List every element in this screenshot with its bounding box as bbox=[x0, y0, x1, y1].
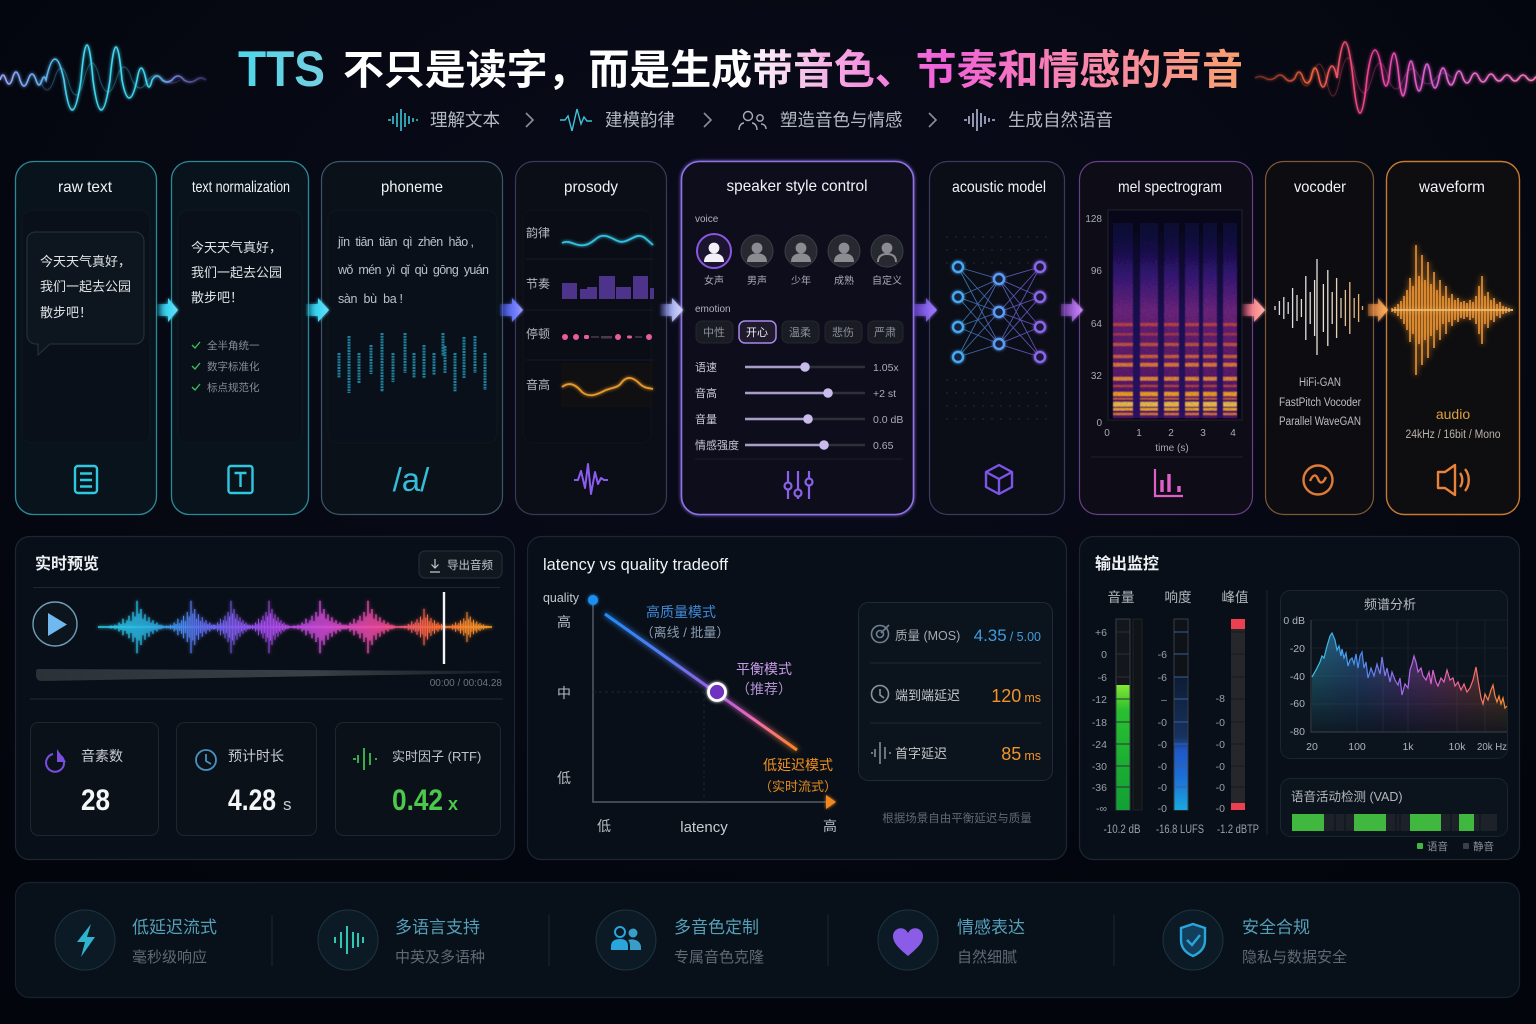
icon: wave 1 bbox=[388, 109, 418, 131]
panel: live preview bbox=[16, 536, 514, 860]
panel: text normalization: text normalization bbox=[192, 179, 290, 196]
title: TTS bbox=[238, 41, 325, 97]
stat: duration: 4.28 bbox=[228, 784, 276, 817]
tradeoff chart: 低 bbox=[557, 770, 571, 786]
emotion chips: 中性 bbox=[703, 325, 725, 339]
spectrum analyser: 1k bbox=[1402, 741, 1414, 753]
voice selector: 成熟 bbox=[834, 274, 854, 287]
loudness meter: – bbox=[1161, 694, 1167, 706]
sliders: 0.0 dB bbox=[873, 414, 903, 426]
voice selector: 少年 bbox=[791, 274, 811, 287]
export button: 导出音频 bbox=[447, 558, 493, 572]
metrics box bbox=[858, 602, 1052, 780]
VAD panel: 语音活动检测 (VAD) bbox=[1291, 789, 1403, 804]
feature: safety bbox=[1163, 910, 1347, 970]
spectrogram chart: time (s) bbox=[1155, 443, 1189, 454]
prosody labels: 停顿 bbox=[526, 326, 550, 341]
VAD legend: 静音 bbox=[1473, 840, 1494, 853]
feature: low latency: 低延迟流式 bbox=[132, 918, 217, 937]
step: understand text: 理解文本 bbox=[430, 110, 500, 130]
caption: 根据场景自由平衡延迟与质量 bbox=[882, 811, 1032, 825]
sliders bbox=[695, 361, 903, 452]
volume meter: -36 bbox=[1092, 782, 1107, 794]
volume meter: -12 bbox=[1092, 694, 1107, 706]
stat: duration: 预计时长 bbox=[228, 748, 284, 764]
feature: multi language: 多语言支持 bbox=[395, 918, 480, 937]
panel: feature strip bbox=[16, 882, 1520, 998]
tradeoff chart: 低 bbox=[597, 818, 611, 834]
volume meter: -6 bbox=[1098, 672, 1107, 684]
audio info: audio bbox=[1436, 406, 1470, 422]
metric: MOS: 质量 (MOS) bbox=[895, 629, 960, 643]
spectrogram chart bbox=[1085, 210, 1242, 454]
volume meter bbox=[1092, 619, 1142, 836]
loudness meter: -16.8 LUFS bbox=[1156, 824, 1204, 836]
feature: low latency: 毫秒级响应 bbox=[132, 948, 207, 966]
feature: safety: 安全合规 bbox=[1242, 918, 1310, 937]
icon: wave 3 bbox=[964, 109, 995, 131]
feature: voice customization: 多音色定制 bbox=[674, 918, 759, 937]
voice selector: 女声 bbox=[704, 274, 724, 287]
spectrum analyser: 0 dB bbox=[1283, 615, 1305, 627]
pinyin bbox=[337, 235, 489, 306]
volume meter: -30 bbox=[1092, 761, 1107, 773]
sliders: 语速 bbox=[695, 361, 717, 374]
stat: duration: s bbox=[283, 795, 292, 814]
emotion chips: 温柔 bbox=[789, 326, 811, 339]
tradeoff chart: （推荐） bbox=[736, 681, 792, 697]
volume meter: -10.2 dB bbox=[1104, 824, 1141, 836]
VAD legend: 语音 bbox=[1427, 840, 1448, 853]
spectrogram chart: 3 bbox=[1200, 428, 1206, 439]
normalized text: 散步吧！ bbox=[191, 290, 243, 305]
volume meter: -∞ bbox=[1096, 803, 1107, 815]
panel: waveform: waveform bbox=[1418, 179, 1485, 196]
stat: phoneme count: 28 bbox=[81, 784, 110, 817]
voice selector: voice bbox=[695, 214, 719, 225]
panel: phoneme: phoneme bbox=[381, 179, 443, 196]
panel: mel spectrogram: mel spectrogram bbox=[1118, 179, 1222, 196]
icon: speaker bbox=[1438, 465, 1469, 495]
normalized text bbox=[191, 240, 282, 305]
voice selector: 自定义 bbox=[872, 274, 902, 287]
playhead bbox=[443, 592, 445, 664]
metric: first token: 首字延迟 bbox=[895, 746, 947, 761]
panel: speaker style control bbox=[682, 162, 914, 514]
checklist bbox=[192, 339, 260, 394]
panel: vocoder bbox=[1266, 162, 1374, 514]
panel: prosody: prosody bbox=[564, 179, 618, 196]
peak meter bbox=[1216, 619, 1259, 836]
metric: MOS: 4.35/ 5.00 bbox=[974, 626, 1041, 645]
emotion chips: 严肃 bbox=[874, 326, 896, 339]
loudness meter: -0 bbox=[1158, 739, 1167, 751]
neural network bbox=[953, 262, 1045, 362]
stat: duration bbox=[176, 722, 316, 836]
stat: real-time factor: 实时因子 (RTF) bbox=[392, 749, 481, 764]
icon: /a/: /a/ bbox=[393, 461, 430, 498]
step: timbre and emotion: 塑造音色与情感 bbox=[780, 110, 902, 130]
stat: phoneme count bbox=[30, 722, 158, 836]
pinyin: jīn tiān tiān qì zhēn hǎo , bbox=[337, 235, 474, 249]
tempo bars bbox=[562, 276, 654, 299]
feature: voice customization: 专属音色克隆 bbox=[674, 949, 764, 966]
panel: latency vs quality bbox=[528, 536, 1066, 860]
spectrogram chart: 4 bbox=[1230, 428, 1236, 439]
peak meter: -0 bbox=[1216, 717, 1225, 729]
arrow 3 bbox=[500, 298, 523, 322]
pipeline steps subtitle bbox=[388, 109, 1113, 131]
metric: latency: 120ms bbox=[991, 686, 1041, 706]
tradeoff chart: 中 bbox=[557, 685, 571, 701]
spectrogram chart: 32 bbox=[1091, 371, 1102, 382]
panel: latency vs quality: latency vs quality tradeoff bbox=[543, 555, 728, 574]
emotion chips: emotion bbox=[695, 304, 731, 315]
feature: multi language: 中英及多语种 bbox=[395, 948, 485, 966]
panel: prosody bbox=[516, 162, 666, 514]
loudness meter: -0 bbox=[1158, 782, 1167, 794]
peak meter: -1.2 dBTP bbox=[1217, 824, 1259, 836]
sliders: 情感强度 bbox=[695, 438, 739, 452]
left header waveform bbox=[0, 45, 206, 110]
voice selector bbox=[695, 214, 903, 287]
tradeoff chart: 高 bbox=[557, 614, 571, 630]
panel: live preview: 实时预览 bbox=[35, 554, 99, 573]
panel: phoneme bbox=[322, 162, 502, 514]
meter headers: 音量 bbox=[1108, 589, 1134, 605]
prosody labels: 音高 bbox=[526, 377, 550, 392]
meter headers: 峰值 bbox=[1222, 590, 1248, 605]
feature: emotion bbox=[878, 910, 1025, 970]
spectrum analyser: -80 bbox=[1290, 726, 1305, 738]
spectrum analyser bbox=[1280, 590, 1508, 758]
chevron bbox=[704, 113, 711, 127]
stat: real-time factor: x bbox=[448, 794, 458, 814]
metric: latency: 端到端延迟 bbox=[895, 688, 960, 703]
meter headers bbox=[1108, 589, 1248, 605]
panel: text normalization bbox=[172, 162, 308, 514]
pinyin: sàn bù ba ! bbox=[338, 292, 403, 306]
vocoder models: Parallel WaveGAN bbox=[1279, 416, 1361, 428]
speech bubble: 我们一起去公园 bbox=[40, 279, 131, 294]
spectrogram chart: 0 bbox=[1104, 428, 1110, 439]
panel: output monitor: 输出监控 bbox=[1095, 554, 1159, 573]
spectrogram chart: 64 bbox=[1091, 319, 1102, 330]
spectrum analyser: -40 bbox=[1290, 671, 1305, 683]
spectrogram chart: 96 bbox=[1091, 266, 1102, 277]
loudness meter bbox=[1156, 619, 1204, 836]
spectrogram chart: 2 bbox=[1168, 428, 1174, 439]
volume meter: +6 bbox=[1095, 627, 1107, 639]
emotion chips: 开心 bbox=[746, 326, 768, 339]
arrow 1 bbox=[157, 298, 178, 322]
volume meter: -24 bbox=[1092, 739, 1107, 751]
loudness meter: -6 bbox=[1158, 672, 1167, 684]
step: generate speech: 生成自然语音 bbox=[1008, 110, 1113, 130]
arrow 6 bbox=[1061, 298, 1083, 322]
normalized text: 今天天气真好， bbox=[191, 240, 282, 255]
spectrum analyser: 10k bbox=[1449, 741, 1466, 753]
arrow 8 bbox=[1368, 298, 1388, 322]
phoneme bars bbox=[339, 333, 485, 393]
chevron bbox=[929, 113, 936, 127]
sliders: 1.05x bbox=[873, 362, 899, 374]
prosody labels bbox=[526, 225, 550, 392]
voice selector: 男声 bbox=[747, 274, 767, 287]
panel: mel spectrogram bbox=[1080, 162, 1252, 514]
tradeoff chart: （离线 / 批量） bbox=[641, 625, 729, 640]
tradeoff chart: 平衡模式 bbox=[736, 661, 792, 677]
VAD legend bbox=[1417, 840, 1494, 853]
play button bbox=[33, 602, 77, 646]
pitch curve bbox=[561, 363, 653, 407]
orange wave bbox=[1392, 245, 1513, 375]
spectrum analyser: -60 bbox=[1290, 698, 1305, 710]
peak meter: -8 bbox=[1216, 693, 1225, 705]
icon: cube bbox=[986, 465, 1012, 494]
loudness meter: -6 bbox=[1158, 649, 1167, 661]
checklist: 标点规范化 bbox=[207, 381, 260, 394]
spectrogram chart: 0 bbox=[1096, 418, 1102, 429]
stat: phoneme count: 音素数 bbox=[81, 748, 123, 764]
peak meter: -0 bbox=[1216, 739, 1225, 751]
stat: real-time factor: 0.42 bbox=[392, 784, 443, 817]
spectrum analyser: -20 bbox=[1290, 643, 1305, 655]
icon: bar chart bbox=[1155, 469, 1183, 496]
prosody labels: 节奏 bbox=[526, 277, 550, 291]
metric: first token: 85ms bbox=[1001, 744, 1041, 764]
panel: speaker style control: speaker style control bbox=[726, 178, 868, 195]
vocoder wave bbox=[1275, 259, 1362, 355]
sliders: 0.65 bbox=[873, 440, 894, 452]
metric: first token bbox=[871, 742, 1041, 764]
speech bubble: 今天天气真好， bbox=[40, 254, 131, 269]
feature: low latency bbox=[55, 910, 217, 970]
panel: raw text bbox=[16, 162, 156, 514]
title: 不只是读字，而是生成带音色、节奏和情感的声音 bbox=[343, 47, 1243, 93]
panel: vocoder: vocoder bbox=[1294, 179, 1347, 196]
peak meter: -0 bbox=[1216, 761, 1225, 773]
checklist: 数字标准化 bbox=[207, 360, 260, 373]
timeline bbox=[36, 669, 502, 689]
chevron bbox=[526, 113, 533, 127]
icon: document bbox=[75, 466, 97, 493]
rhythm curve bbox=[562, 236, 653, 245]
panel: output monitor bbox=[1080, 536, 1520, 860]
loudness meter: -0 bbox=[1158, 717, 1167, 729]
loudness meter: -0 bbox=[1158, 761, 1167, 773]
prosody labels: 韵律 bbox=[526, 225, 550, 240]
spectrum analyser: 频谱分析 bbox=[1364, 597, 1416, 612]
spectrum analyser: 20 bbox=[1306, 741, 1318, 753]
icon: wave 2 bbox=[560, 109, 592, 131]
volume meter: -18 bbox=[1092, 717, 1107, 729]
normalized text: 我们一起去公园 bbox=[191, 265, 282, 280]
sliders: +2 st bbox=[873, 388, 896, 400]
tradeoff chart: latency bbox=[680, 819, 728, 836]
speech bubble bbox=[27, 232, 144, 355]
feature: emotion: 自然细腻 bbox=[957, 949, 1017, 966]
panel: waveform bbox=[1386, 162, 1520, 514]
icon: oscillator bbox=[1304, 466, 1332, 494]
sliders: 音量 bbox=[695, 412, 717, 426]
panel: acoustic model bbox=[930, 162, 1064, 514]
panel: waveform: 24kHz / 16bit / Mono bbox=[1406, 429, 1500, 441]
speech bubble: 散步吧！ bbox=[40, 305, 92, 320]
vocoder models bbox=[1279, 377, 1361, 428]
emotion chips bbox=[695, 304, 903, 343]
meter headers: 响度 bbox=[1164, 590, 1192, 605]
tradeoff chart: （实时流式） bbox=[759, 779, 837, 794]
volume meter: 0 bbox=[1101, 649, 1107, 661]
vocoder models: HiFi-GAN bbox=[1299, 377, 1341, 389]
feature: multi language bbox=[318, 910, 485, 970]
pause dots bbox=[562, 334, 652, 340]
spectrogram chart: 1 bbox=[1136, 428, 1142, 439]
arrow 5 bbox=[914, 298, 937, 322]
step: prosody modeling: 建模韵律 bbox=[605, 110, 675, 130]
icon: sliders bbox=[784, 471, 812, 499]
peak meter: -0 bbox=[1216, 782, 1225, 794]
tradeoff chart: 高 bbox=[823, 818, 837, 834]
arrow 2 bbox=[306, 298, 329, 322]
metric: latency bbox=[872, 686, 1041, 706]
tradeoff chart: 高质量模式 bbox=[646, 604, 716, 620]
emotion chips: 悲伤 bbox=[832, 325, 854, 339]
checklist: 全半角统一 bbox=[207, 339, 260, 352]
arrow 4 bbox=[660, 298, 683, 322]
stat: real-time factor bbox=[336, 722, 500, 836]
export button bbox=[419, 551, 502, 578]
icon: T box bbox=[228, 466, 252, 493]
panel: acoustic model: acoustic model bbox=[952, 179, 1046, 196]
pinyin: wǒ mén yì qǐ qù gōng yuán bbox=[337, 263, 489, 277]
VAD panel bbox=[1280, 778, 1508, 853]
sliders: 音高 bbox=[695, 386, 717, 400]
preview waveform bbox=[96, 599, 494, 655]
icon: prosody wave bbox=[574, 464, 608, 494]
timeline: 00:00 / 00:04.28 bbox=[430, 678, 502, 689]
feature: voice customization bbox=[596, 910, 764, 970]
tradeoff chart bbox=[543, 590, 837, 836]
metric: MOS bbox=[872, 625, 1041, 645]
spectrum analyser: 100 bbox=[1348, 741, 1366, 753]
tradeoff chart: quality bbox=[543, 590, 579, 605]
vocoder models: FastPitch Vocoder bbox=[1279, 397, 1361, 409]
right header waveform bbox=[1255, 42, 1536, 113]
spectrogram chart: 128 bbox=[1085, 214, 1102, 225]
arrow 7 bbox=[1242, 298, 1265, 322]
loudness meter: -0 bbox=[1158, 803, 1167, 815]
panel: raw text: raw text bbox=[58, 179, 113, 196]
spectrum analyser: 20k Hz bbox=[1477, 741, 1507, 753]
icon: people bbox=[739, 112, 766, 130]
feature: emotion: 情感表达 bbox=[957, 918, 1025, 937]
feature: safety: 隐私与数据安全 bbox=[1242, 948, 1347, 966]
peak meter: -0 bbox=[1216, 803, 1225, 815]
tradeoff chart: 低延迟模式 bbox=[763, 757, 833, 773]
